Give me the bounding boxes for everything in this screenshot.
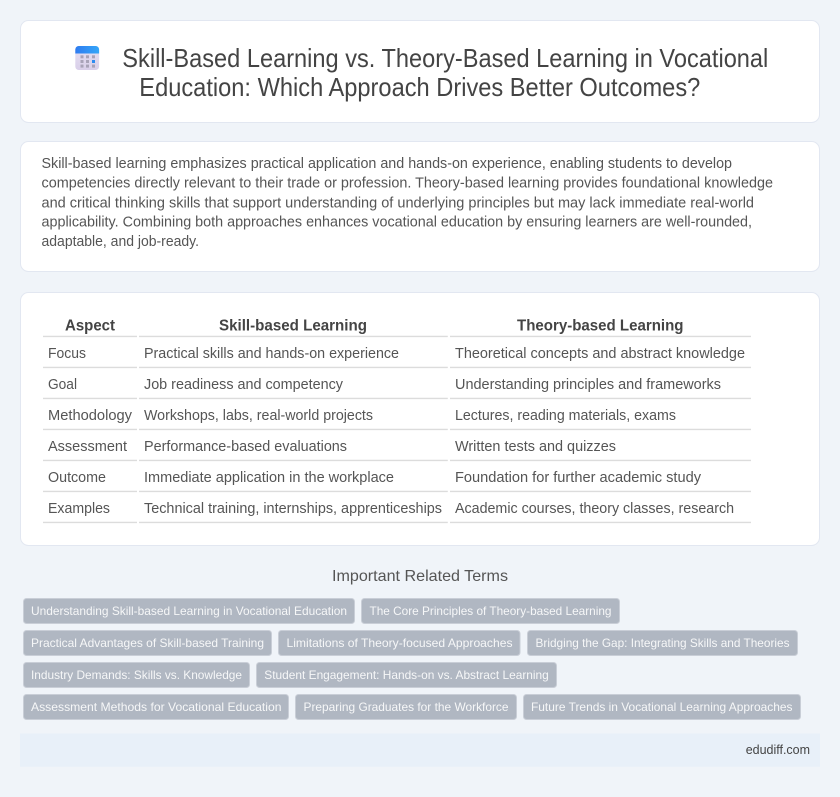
table row: Outcome: Foundation for further academic study — [455, 470, 702, 486]
table header: Theory-based Learning — [517, 318, 684, 335]
title: Skill-Based Learning vs. Theory-Based Learning in Vocational — [122, 45, 768, 73]
text block: introduction paragraph: Skill-based learning emphasizes practical application and hands-on experience, enabling students to develop — [42, 156, 732, 172]
table row: Methodology — [43, 408, 751, 429]
tag — [524, 694, 800, 720]
footer: source label: edudiff.com — [746, 742, 810, 757]
table row: Outcome: Outcome — [48, 470, 106, 486]
table row: Assessment: Assessment — [48, 439, 127, 455]
text block: introduction paragraph: competencies directly relevant to their trade or profession. Theory-based learning provides foundational knowledge — [42, 176, 773, 192]
table row: Examples: Technical training, internships, apprenticeships — [144, 501, 442, 517]
footer — [20, 734, 820, 767]
tag — [256, 662, 556, 688]
tag: Limitations of Theory-focused Approaches — [286, 636, 512, 650]
tag: Industry Demands: Skills vs. Knowledge — [31, 668, 242, 682]
tag: Bridging the Gap: Integrating Skills and Theories — [536, 636, 790, 650]
text block: introduction paragraph: adaptable, and job-ready. — [42, 234, 199, 250]
table row: Examples: Examples — [48, 501, 110, 517]
title: Education: Which Approach Drives Better Outcomes? — [139, 74, 700, 102]
panel: comparison table — [20, 292, 820, 546]
table row: Assessment — [43, 439, 751, 460]
tag — [278, 630, 520, 656]
icon: calendar — [75, 46, 99, 70]
table row: Goal: Job readiness and competency — [144, 377, 344, 393]
table row: Assessment: Written tests and quizzes — [455, 439, 616, 455]
table row: Focus — [43, 346, 751, 367]
panel: introduction — [20, 142, 820, 272]
text block: introduction paragraph: applicability. Combining both approaches enhances vocational education by ensuring learners are well-rounded, — [42, 215, 752, 231]
tag — [24, 694, 288, 720]
table row: Examples — [43, 501, 751, 522]
table row: Goal — [43, 377, 751, 398]
table row: Focus: Focus — [48, 346, 86, 362]
tag: Understanding Skill-based Learning in Vocational Education — [31, 604, 347, 618]
table row: Methodology: Lectures, reading materials, exams — [455, 408, 676, 424]
table row: Assessment: Performance-based evaluations — [144, 439, 347, 455]
tag — [528, 630, 798, 656]
tag — [24, 630, 272, 656]
tag: Student Engagement: Hands-on vs. Abstract Learning — [264, 668, 549, 682]
tag: Assessment Methods for Vocational Education — [31, 700, 282, 714]
text block: introduction paragraph — [42, 156, 773, 250]
table header — [43, 318, 751, 336]
table row: Goal: Understanding principles and frameworks — [455, 377, 721, 393]
table row: Focus: Practical skills and hands-on experience — [144, 346, 399, 362]
table row: Outcome: Immediate application in the workplace — [144, 470, 394, 486]
tag: Practical Advantages of Skill-based Training — [31, 636, 264, 650]
table header: Aspect — [65, 318, 115, 335]
title — [122, 45, 768, 102]
table row: Goal: Goal — [48, 377, 77, 393]
text block: introduction paragraph: and critical thinking skills that support understanding of underlying principles but may lack immediate real-world — [42, 196, 754, 212]
table row: Methodology: Workshops, labs, real-world projects — [144, 408, 373, 424]
table row: Examples: Academic courses, theory classes, research — [455, 501, 734, 517]
table row: Outcome — [43, 470, 751, 491]
table row: Focus: Theoretical concepts and abstract knowledge — [455, 346, 745, 362]
related terms tags — [24, 598, 800, 720]
tag: Future Trends in Vocational Learning Approaches — [531, 700, 792, 714]
panel: title card — [20, 20, 820, 122]
tag — [24, 598, 354, 624]
tag — [24, 662, 250, 688]
table row: Methodology: Methodology — [48, 408, 133, 424]
tag — [362, 598, 620, 624]
tag: Preparing Graduates for the Workforce — [304, 700, 509, 714]
heading: related terms: Important Related Terms — [332, 568, 508, 585]
tag: The Core Principles of Theory-based Learning — [370, 604, 612, 618]
table header: Skill-based Learning — [219, 318, 367, 335]
tag — [296, 694, 516, 720]
